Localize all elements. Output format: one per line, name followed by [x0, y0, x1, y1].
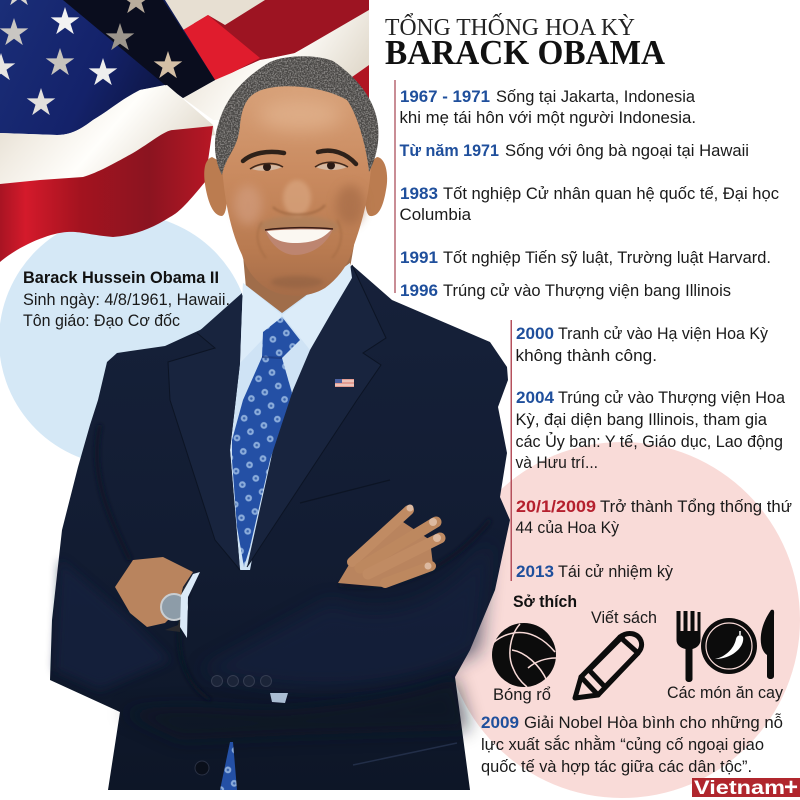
shirt cuff	[180, 572, 200, 638]
timeline: political career: và Hưu trí...	[516, 453, 598, 472]
personal info: Tôn giáo: Đạo Cơ đốc	[23, 311, 180, 330]
logo: Vietnam+: Vietnam	[694, 778, 785, 799]
timeline: political career: các Ủy ban: Y tế, Giáo dục, Lao động	[516, 432, 783, 451]
title: TỔNG THỐNG HOA KỲ	[385, 14, 635, 41]
title: BARACK OBAMA	[385, 33, 666, 72]
timeline: early years: 1991	[400, 248, 438, 267]
timeline: political career: 44 của Hoa Kỳ	[516, 518, 619, 537]
timeline: Nobel prize	[481, 713, 783, 776]
timeline: early years: 1983	[400, 184, 438, 203]
timeline: political career: 20/1/2009	[516, 497, 596, 516]
timeline: early years: 1996	[400, 281, 438, 300]
face shading	[234, 99, 364, 288]
breast pocket	[300, 480, 390, 503]
logo: Vietnam+	[692, 774, 800, 800]
shirt	[230, 263, 352, 570]
timeline: political career: Trở thành Tổng thống thứ	[600, 497, 792, 516]
right hand	[338, 504, 441, 587]
timeline: political career: 2000	[516, 324, 554, 343]
timeline: early years: Columbia	[400, 205, 472, 224]
left hand	[115, 557, 193, 627]
necktie	[220, 317, 300, 790]
timeline: early years: Tốt nghiệp Cử nhân quan hệ quốc tế, Đại học	[443, 184, 779, 203]
timeline: Nobel prize: 2009	[481, 713, 519, 732]
portrait of Barack Obama	[50, 56, 510, 790]
timeline: political career	[510, 320, 792, 581]
smile	[265, 227, 333, 255]
hair	[215, 56, 378, 175]
suit jacket	[50, 265, 510, 790]
timeline: political career: không thành công.	[516, 346, 657, 365]
timeline: political career: 2004	[516, 388, 555, 407]
label: basketball: Bóng rổ	[493, 685, 551, 704]
personal info: Barack Hussein Obama II	[23, 268, 219, 287]
American flag	[0, 0, 369, 262]
icon: fork, plate with chili and knife	[676, 610, 774, 682]
background circle: blue	[0, 214, 251, 466]
face	[221, 78, 372, 296]
personal info: Sinh ngày: 4/8/1961, Hawaii.	[23, 290, 230, 309]
timeline: Nobel prize: lực xuất sắc nhằm “củng cố ngoại giao	[481, 735, 764, 754]
timeline: political career: Kỳ, đại diện bang Illinois, tham gia	[516, 410, 768, 429]
timeline: Nobel prize: Giải Nobel Hòa bình cho những nỗ	[524, 713, 783, 732]
ears	[204, 157, 387, 216]
background circle: pink	[444, 442, 800, 798]
lapel pin: flag	[335, 379, 354, 387]
neck	[243, 245, 354, 318]
timeline: early years: Sống với ông bà ngoại tại Hawaii	[505, 141, 749, 160]
timeline: political career: Tranh cử vào Hạ viện Hoa Kỳ	[558, 324, 768, 343]
hobbies heading: Sở thích	[513, 592, 577, 611]
sleeve cuff shirt	[270, 693, 288, 703]
timeline: early years: Trúng cử vào Thượng viện bang Illinois	[443, 281, 731, 300]
timeline: early years: 1967 - 1971	[400, 87, 490, 106]
icon: basketball	[492, 623, 556, 687]
watch	[161, 572, 195, 632]
sleeve buttons	[212, 676, 272, 686]
title	[385, 14, 666, 72]
personal info	[23, 268, 230, 330]
icon: pencil	[575, 634, 642, 698]
head	[204, 56, 387, 296]
eyebrows	[243, 151, 356, 164]
suit shading	[55, 425, 490, 740]
jacket lapels	[168, 265, 386, 570]
timeline: political career: 2013	[516, 562, 554, 581]
label: writing books: Viết sách	[591, 608, 657, 627]
lower pocket	[353, 743, 457, 765]
timeline: political career: Tái cử nhiệm kỳ	[558, 562, 673, 581]
timeline: early years: Sống tại Jakarta, Indonesia	[496, 87, 696, 106]
label: spicy food: Các món ăn cay	[667, 683, 783, 702]
timeline: Nobel prize: quốc tế và hợp tác giữa các dân tộc”.	[481, 757, 752, 776]
eyes	[250, 162, 348, 171]
timeline: political career: Trúng cử vào Thượng viện Hoa	[558, 388, 786, 407]
timeline: early years: Từ năm 1971	[400, 141, 499, 160]
timeline: early years: khi mẹ tái hôn với một người Indonesia.	[400, 108, 696, 127]
timeline: early years: Tốt nghiệp Tiến sỹ luật, Trường luật Harvard.	[443, 248, 771, 267]
shirt collar	[240, 263, 352, 363]
timeline: early years	[394, 80, 779, 300]
jacket button	[195, 761, 209, 775]
